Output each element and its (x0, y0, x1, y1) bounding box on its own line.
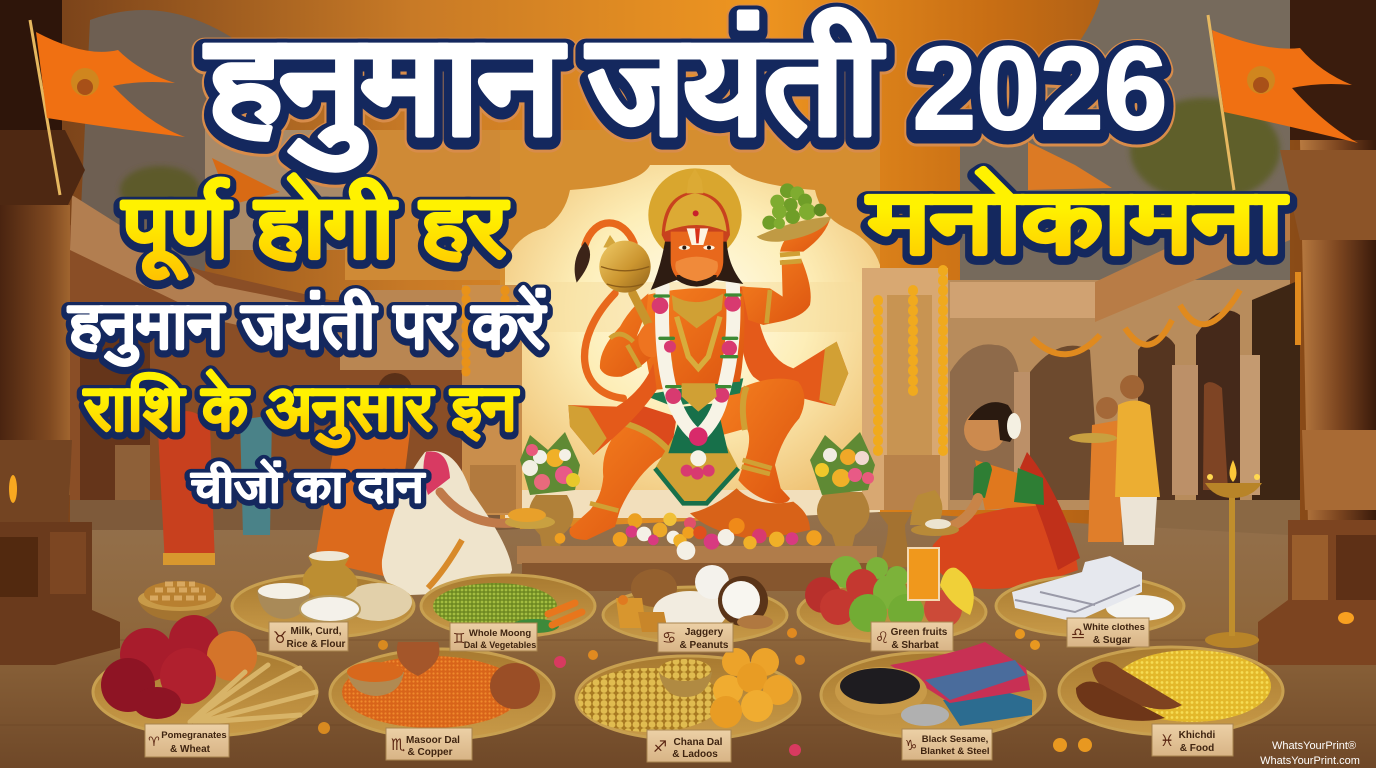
label: Libra white clothes and sugar: ♎ (1071, 624, 1085, 643)
left foreground pillar (0, 0, 120, 665)
title number: 2026: 2026 (912, 27, 1168, 159)
label: Gemini moong dal and vegetables: Whole Moong (469, 628, 531, 639)
seated woman in red sari with offering (911, 402, 1080, 589)
armlets and bangles (590, 253, 802, 511)
label: Capricorn black sesame, blanket and steel (902, 729, 992, 760)
text line small white: चीजों का दान (190, 456, 426, 525)
floor tile lines (0, 640, 1376, 725)
tail tuft (575, 242, 590, 283)
label: Leo green fruits and sharbat (871, 622, 953, 651)
right arm raised (742, 217, 831, 325)
offered flowers (555, 513, 822, 560)
subheading right: मनोकामना (866, 163, 1288, 300)
flag right (1208, 15, 1358, 190)
text line white: हनुमान जयंती पर करें (68, 281, 547, 380)
long necklace (677, 317, 720, 368)
label: Taurus milk, curd, rice and flour (269, 622, 348, 651)
label: Taurus milk, curd, rice and flour: Rice & Flour (287, 639, 346, 650)
raised scarf (739, 286, 848, 406)
label: Leo green fruits and sharbat: ♌ (875, 628, 889, 647)
label: Sagittarius chana dal and laddoos (647, 730, 731, 762)
plate: black sesame, blanket and steel (821, 642, 1045, 738)
label: Pisces khichdi and food: Khichdi (1179, 730, 1216, 741)
label: Scorpio masoor dal and copper: ♏ (391, 735, 405, 754)
plate: moong dal and vegetables (421, 575, 595, 637)
background: central carved arch with golden glow (500, 130, 880, 520)
label: Capricorn black sesame, blanket and steel: Blanket & Steel (920, 746, 990, 757)
plate: jaggery and peanuts (603, 565, 787, 643)
background: right courtyard with tree, flag and arches (945, 0, 1300, 545)
hand on mace (638, 323, 665, 357)
label: Capricorn black sesame, blanket and steel: Black Sesame, (922, 734, 988, 745)
small bowl of nuts (138, 581, 222, 621)
flower garland (652, 283, 741, 446)
label: Gemini moong dal and vegetables: Dal & Vegetables (464, 640, 536, 650)
Hanuman figure (555, 168, 848, 560)
label: Aries pomegranates and wheat: ♈ (148, 735, 160, 750)
title number: 2026: 2026 (912, 28, 1168, 160)
label: Scorpio masoor dal and copper: & Copper (408, 747, 453, 758)
right foreground pillar (1258, 0, 1376, 665)
flag left (30, 20, 185, 195)
plate: milk, curd, rice and flour (232, 551, 414, 637)
title word: Hanuman: हनुमान (205, 0, 566, 205)
label: Libra white clothes and sugar (1067, 618, 1149, 647)
background worshipper: woman in red sari (158, 411, 215, 565)
title word: Jayanti: जयंती (586, 0, 885, 205)
text line yellow: राशि के अनुसार इन (83, 363, 519, 461)
label: Pisces khichdi and food: & Food (1180, 743, 1214, 754)
background worshipper: woman in teal sari (240, 415, 272, 535)
label: Leo green fruits and sharbat: Green fruits (891, 627, 948, 638)
label: Libra white clothes and sugar: White clothes (1083, 622, 1145, 633)
brass standing lamp (1205, 460, 1262, 648)
hair (651, 242, 743, 290)
background worshipper: woman in orange sari (315, 373, 412, 578)
label: Cancer jaggery and peanuts: Jaggery (685, 627, 724, 638)
plate: masoor dal and copper (330, 642, 554, 739)
left arm (600, 293, 665, 377)
background: left courtyard with dusk sky and tree (70, 10, 520, 540)
plate: white clothes and sugar (996, 556, 1184, 636)
fruit plate with green fruits (757, 183, 832, 242)
brass pots near woman (878, 490, 942, 567)
seated woman in white sari offering sweets (382, 451, 522, 595)
left scarf gold end (568, 405, 607, 455)
text line yellow: राशि के अनुसार इन (83, 365, 519, 463)
legs (570, 379, 804, 540)
right brass vase with flower bouquet (810, 432, 875, 548)
subheading right: मनोकामना (866, 160, 1288, 297)
necklaces (672, 293, 723, 328)
label: Cancer jaggery and peanuts: & Peanuts (680, 640, 729, 651)
rock under foot (690, 488, 810, 538)
watermark (1260, 740, 1360, 767)
plate: green fruits and sharbat (798, 548, 986, 642)
stone floor (0, 512, 1376, 768)
left inner pillar with marigold garlands (462, 285, 522, 515)
right inner pillar with marigold garlands (862, 268, 948, 510)
label: Libra white clothes and sugar: & Sugar (1093, 635, 1131, 646)
label: Leo green fruits and sharbat: & Sharbat (891, 640, 939, 651)
belt (682, 383, 717, 412)
garland tassel (681, 450, 715, 480)
plate: chana dal and laddoos (576, 648, 800, 740)
crown (665, 168, 727, 232)
scattered marigolds on floor (318, 595, 1092, 756)
label: Aries pomegranates and wheat (145, 724, 229, 757)
label: Scorpio masoor dal and copper (386, 728, 472, 760)
crown red inner (662, 192, 730, 245)
label: Gemini moong dal and vegetables (450, 623, 537, 651)
standing couple with offering plate (1069, 375, 1160, 545)
bowl of sweets in seated woman's hand (505, 508, 555, 529)
left scarf (568, 363, 657, 455)
label: Sagittarius chana dal and laddoos: & Ladoos (672, 749, 718, 760)
label: Sagittarius chana dal and laddoos: ♐ (653, 737, 667, 756)
label: Pisces khichdi and food (1152, 724, 1233, 756)
tail (585, 223, 634, 398)
main title (205, 0, 1167, 205)
label: Aries pomegranates and wheat: & Wheat (170, 744, 211, 755)
label: Taurus milk, curd, rice and flour: ♉ (273, 628, 287, 647)
label: Cancer jaggery and peanuts: ♋ (662, 628, 676, 647)
label: Sagittarius chana dal and laddoos: Chana Dal (674, 737, 723, 748)
mace (599, 235, 668, 363)
label: Capricorn black sesame, blanket and steel: ♑ (905, 738, 917, 754)
head (671, 228, 723, 287)
subheading left: पूर्ण होगी हर (121, 166, 509, 300)
left brass vase with flower bouquet (520, 432, 580, 548)
text line small white: चीजों का दान (190, 455, 426, 524)
label: Cancer jaggery and peanuts (658, 623, 733, 652)
watermark: WhatsYourPrint.com (1260, 755, 1360, 767)
watermark: WhatsYourPrint® (1272, 740, 1356, 752)
label: Gemini moong dal and vegetables: ♊ (453, 631, 465, 647)
label: Aries pomegranates and wheat: Pomegranates (161, 730, 227, 741)
subheading left: पूर्ण होगी हर (121, 169, 509, 303)
title number: 2026: 2026 (912, 23, 1168, 155)
scarf gold end (819, 342, 848, 406)
carved stone pedestal (517, 546, 877, 591)
dhoti (624, 378, 747, 503)
label: Scorpio masoor dal and copper: Masoor Dal (406, 735, 460, 746)
label: Taurus milk, curd, rice and flour: Milk, Curd, (290, 626, 342, 637)
plate: pomegranates and wheat (93, 615, 317, 736)
torso (644, 288, 744, 390)
label: Pisces khichdi and food: ♓ (1160, 731, 1174, 750)
text line white: हनुमान जयंती पर करें (68, 283, 547, 382)
plate: khichdi and shoes (1059, 647, 1283, 735)
crown halo (648, 168, 742, 262)
